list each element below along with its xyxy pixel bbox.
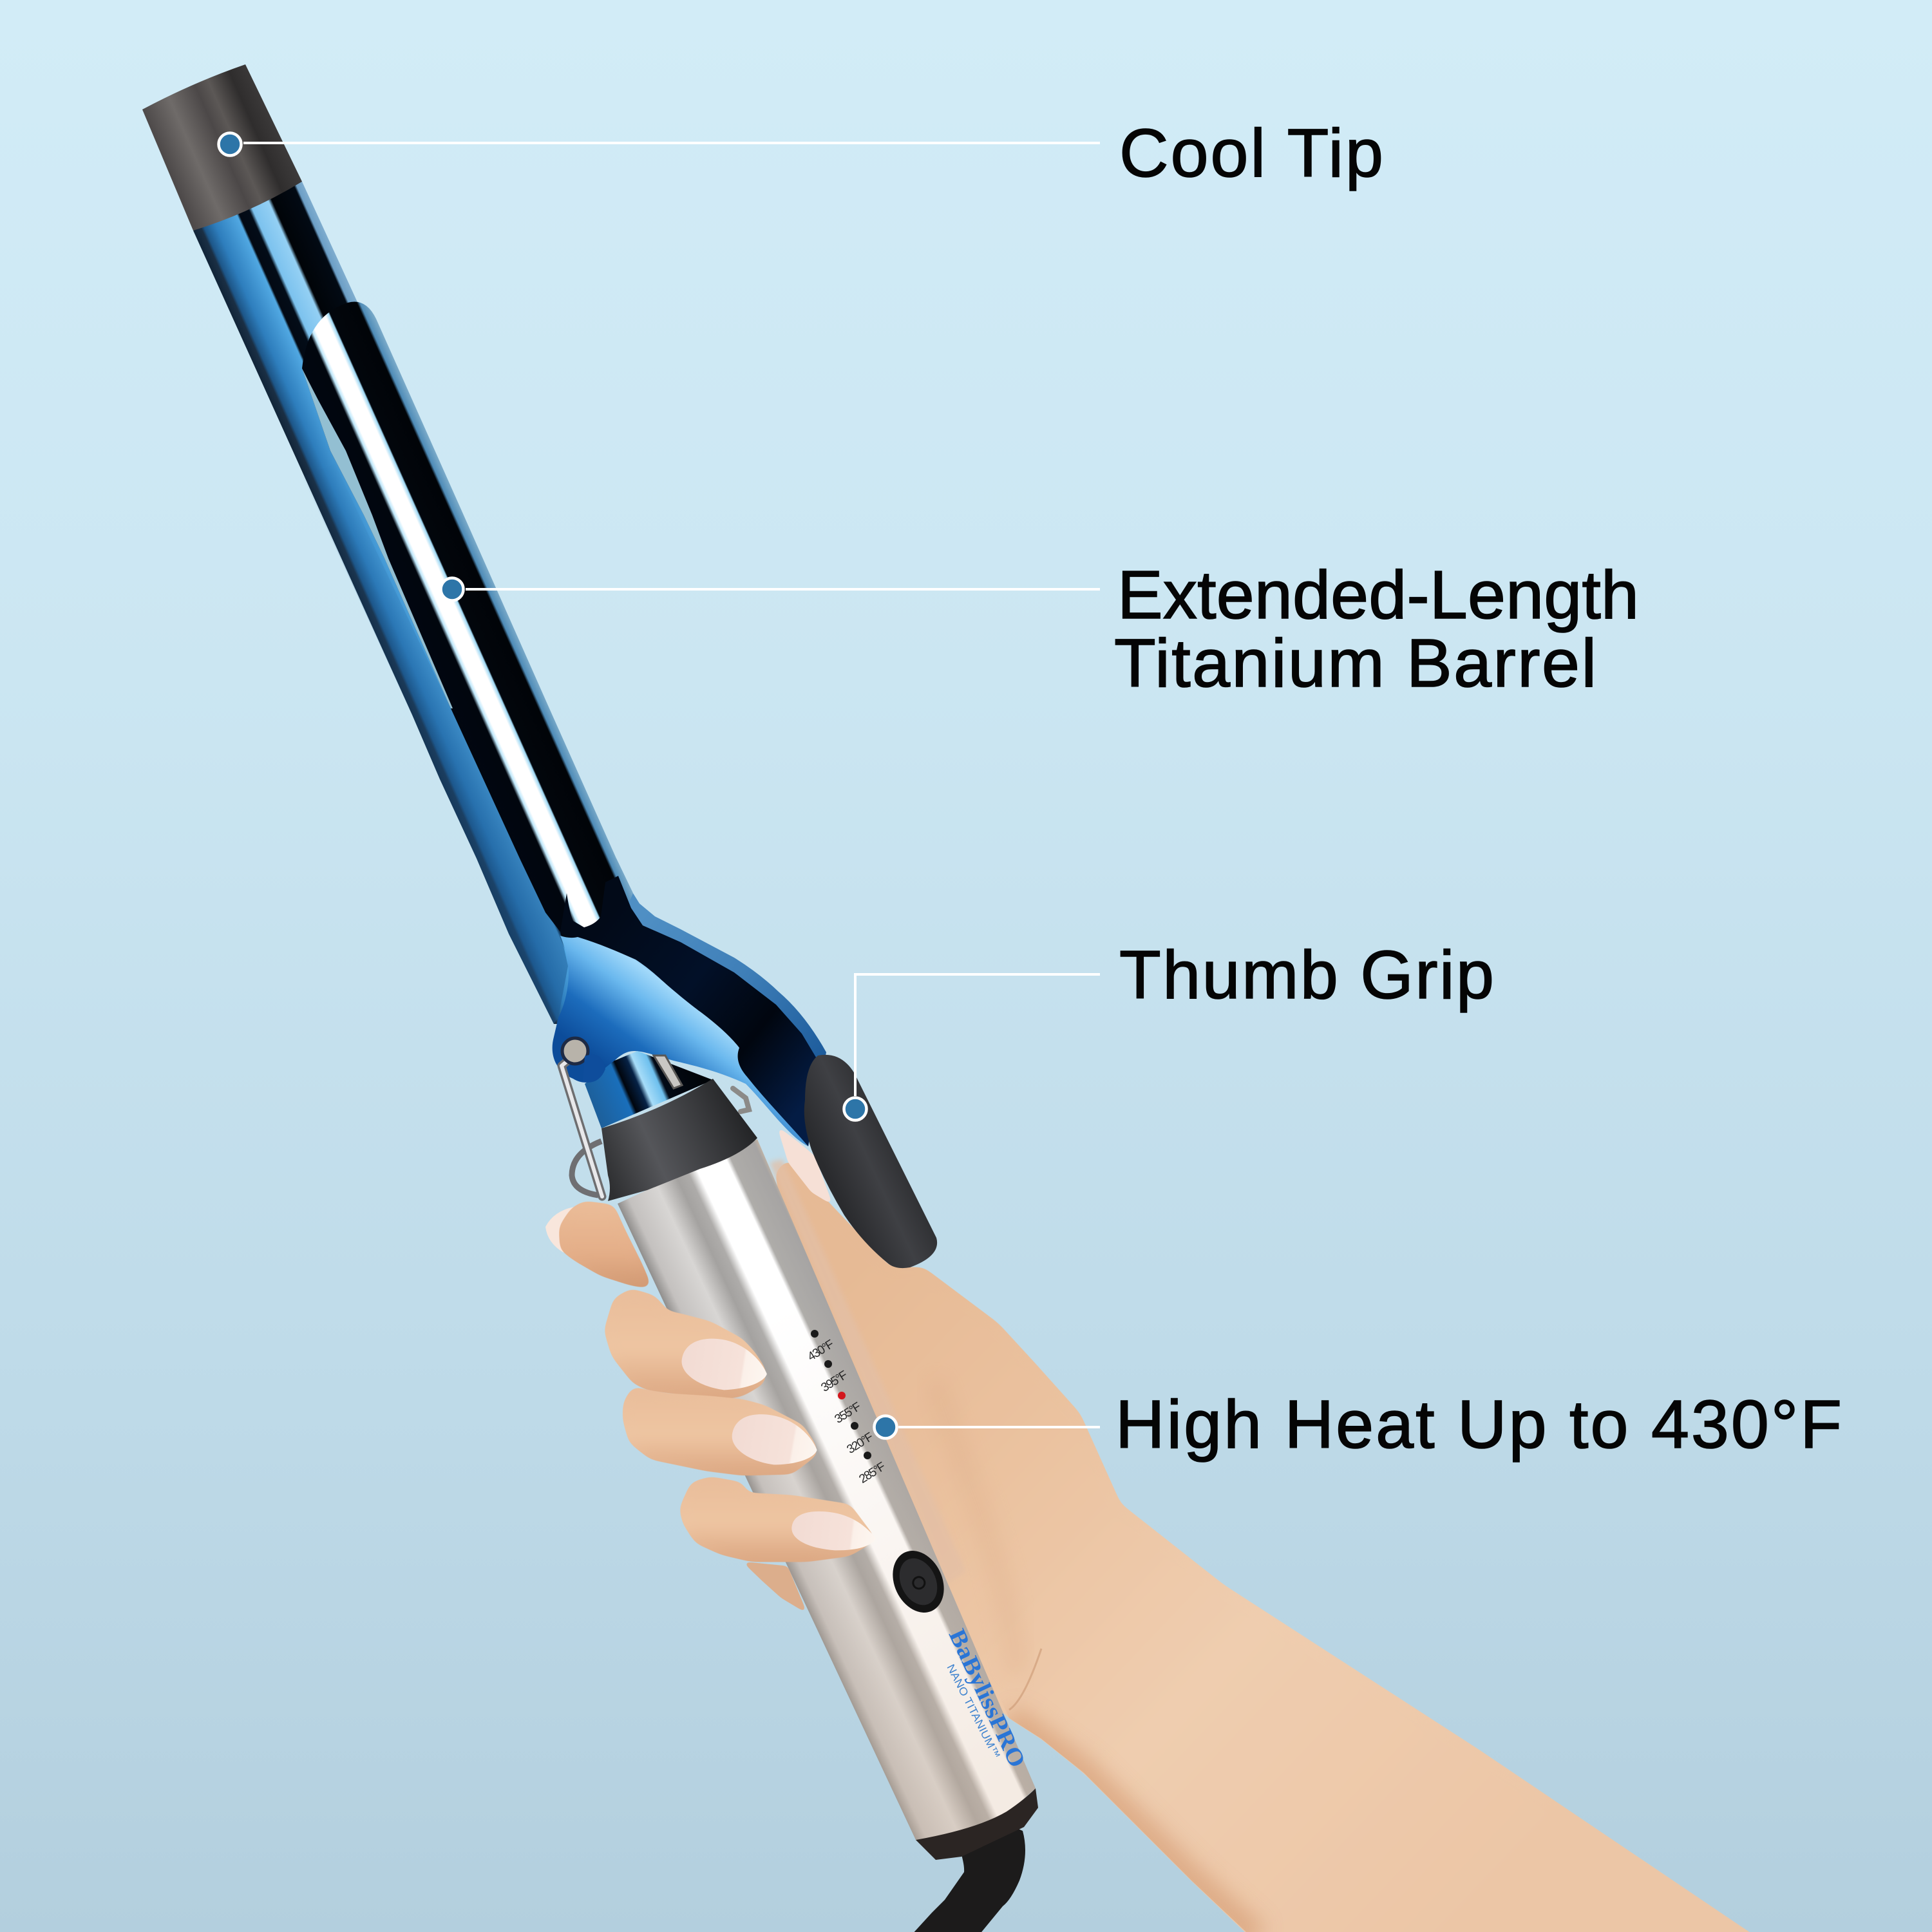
barrel — [193, 182, 618, 1024]
handle warm tone — [618, 1139, 1036, 1840]
callout: Extended-Length Titanium Barrel: Extended-Length — [1117, 557, 1639, 633]
little finger — [679, 1477, 876, 1562]
temperature scale: 320°F — [845, 1430, 876, 1457]
wire loop — [572, 1141, 601, 1195]
lower barrel blue deepening — [303, 464, 568, 1024]
clamp silver sliver — [302, 368, 453, 708]
thumb nail — [777, 1126, 833, 1205]
power cord strain relief — [911, 1823, 1025, 1932]
skin reflection beside handle — [770, 1159, 966, 1584]
power button — [883, 1542, 954, 1621]
end cap — [916, 1788, 1038, 1860]
ring finger — [623, 1387, 818, 1475]
pivot — [583, 1055, 605, 1083]
little nail — [790, 1508, 878, 1555]
temperature scale — [806, 1330, 888, 1486]
forearm lower edge shading — [1009, 1718, 1256, 1932]
collar — [601, 1079, 757, 1201]
callout: High Heat Up to 430°F: High Heat Up to 430°F — [1115, 1387, 1842, 1463]
middle nail — [678, 1334, 771, 1396]
temperature scale: 285°F — [857, 1460, 888, 1486]
index finger — [559, 1201, 652, 1289]
curling iron — [142, 64, 1038, 1860]
temperature scale: 355°F — [833, 1400, 864, 1426]
clamp bright blue lever — [553, 936, 808, 1146]
hand: fingers — [545, 1201, 878, 1613]
clamp rim silhouette — [580, 858, 826, 1146]
brand logo: BaBylissPRO — [943, 1625, 1030, 1772]
callout: Cool Tip: Cool Tip — [1119, 115, 1383, 191]
callout: Extended-Length Titanium Barrel — [440, 557, 1639, 701]
temperature scale: 395°F — [819, 1368, 850, 1395]
callout: Thumb Grip: Thumb Grip — [1119, 937, 1494, 1013]
web of hand — [743, 1562, 807, 1613]
spring hook — [733, 1088, 749, 1112]
callout: Thumb Grip — [844, 937, 1494, 1121]
middle finger — [604, 1289, 766, 1399]
screw — [562, 1038, 588, 1064]
handle — [618, 1139, 1036, 1840]
wire stirrup — [562, 1059, 602, 1197]
index nail — [545, 1207, 574, 1253]
palm shading — [934, 1378, 1018, 1674]
temperature scale: 430°F — [806, 1338, 837, 1364]
clamp dark neck — [560, 876, 819, 1146]
barrel stem below lever — [585, 1051, 713, 1128]
cap — [142, 64, 302, 231]
brand logo: NANO TITANIUM™ — [944, 1662, 1003, 1761]
palm crease — [1009, 1649, 1041, 1710]
ring nail — [728, 1409, 822, 1472]
thumb grip — [804, 1055, 937, 1268]
hand: palm, thumb and forearm — [770, 1126, 1777, 1932]
clamp arm — [302, 301, 633, 932]
silver rod — [654, 1056, 682, 1088]
callout: Extended-Length Titanium Barrel: Titanium Barrel — [1114, 625, 1596, 701]
callout: Cool Tip — [219, 115, 1383, 191]
